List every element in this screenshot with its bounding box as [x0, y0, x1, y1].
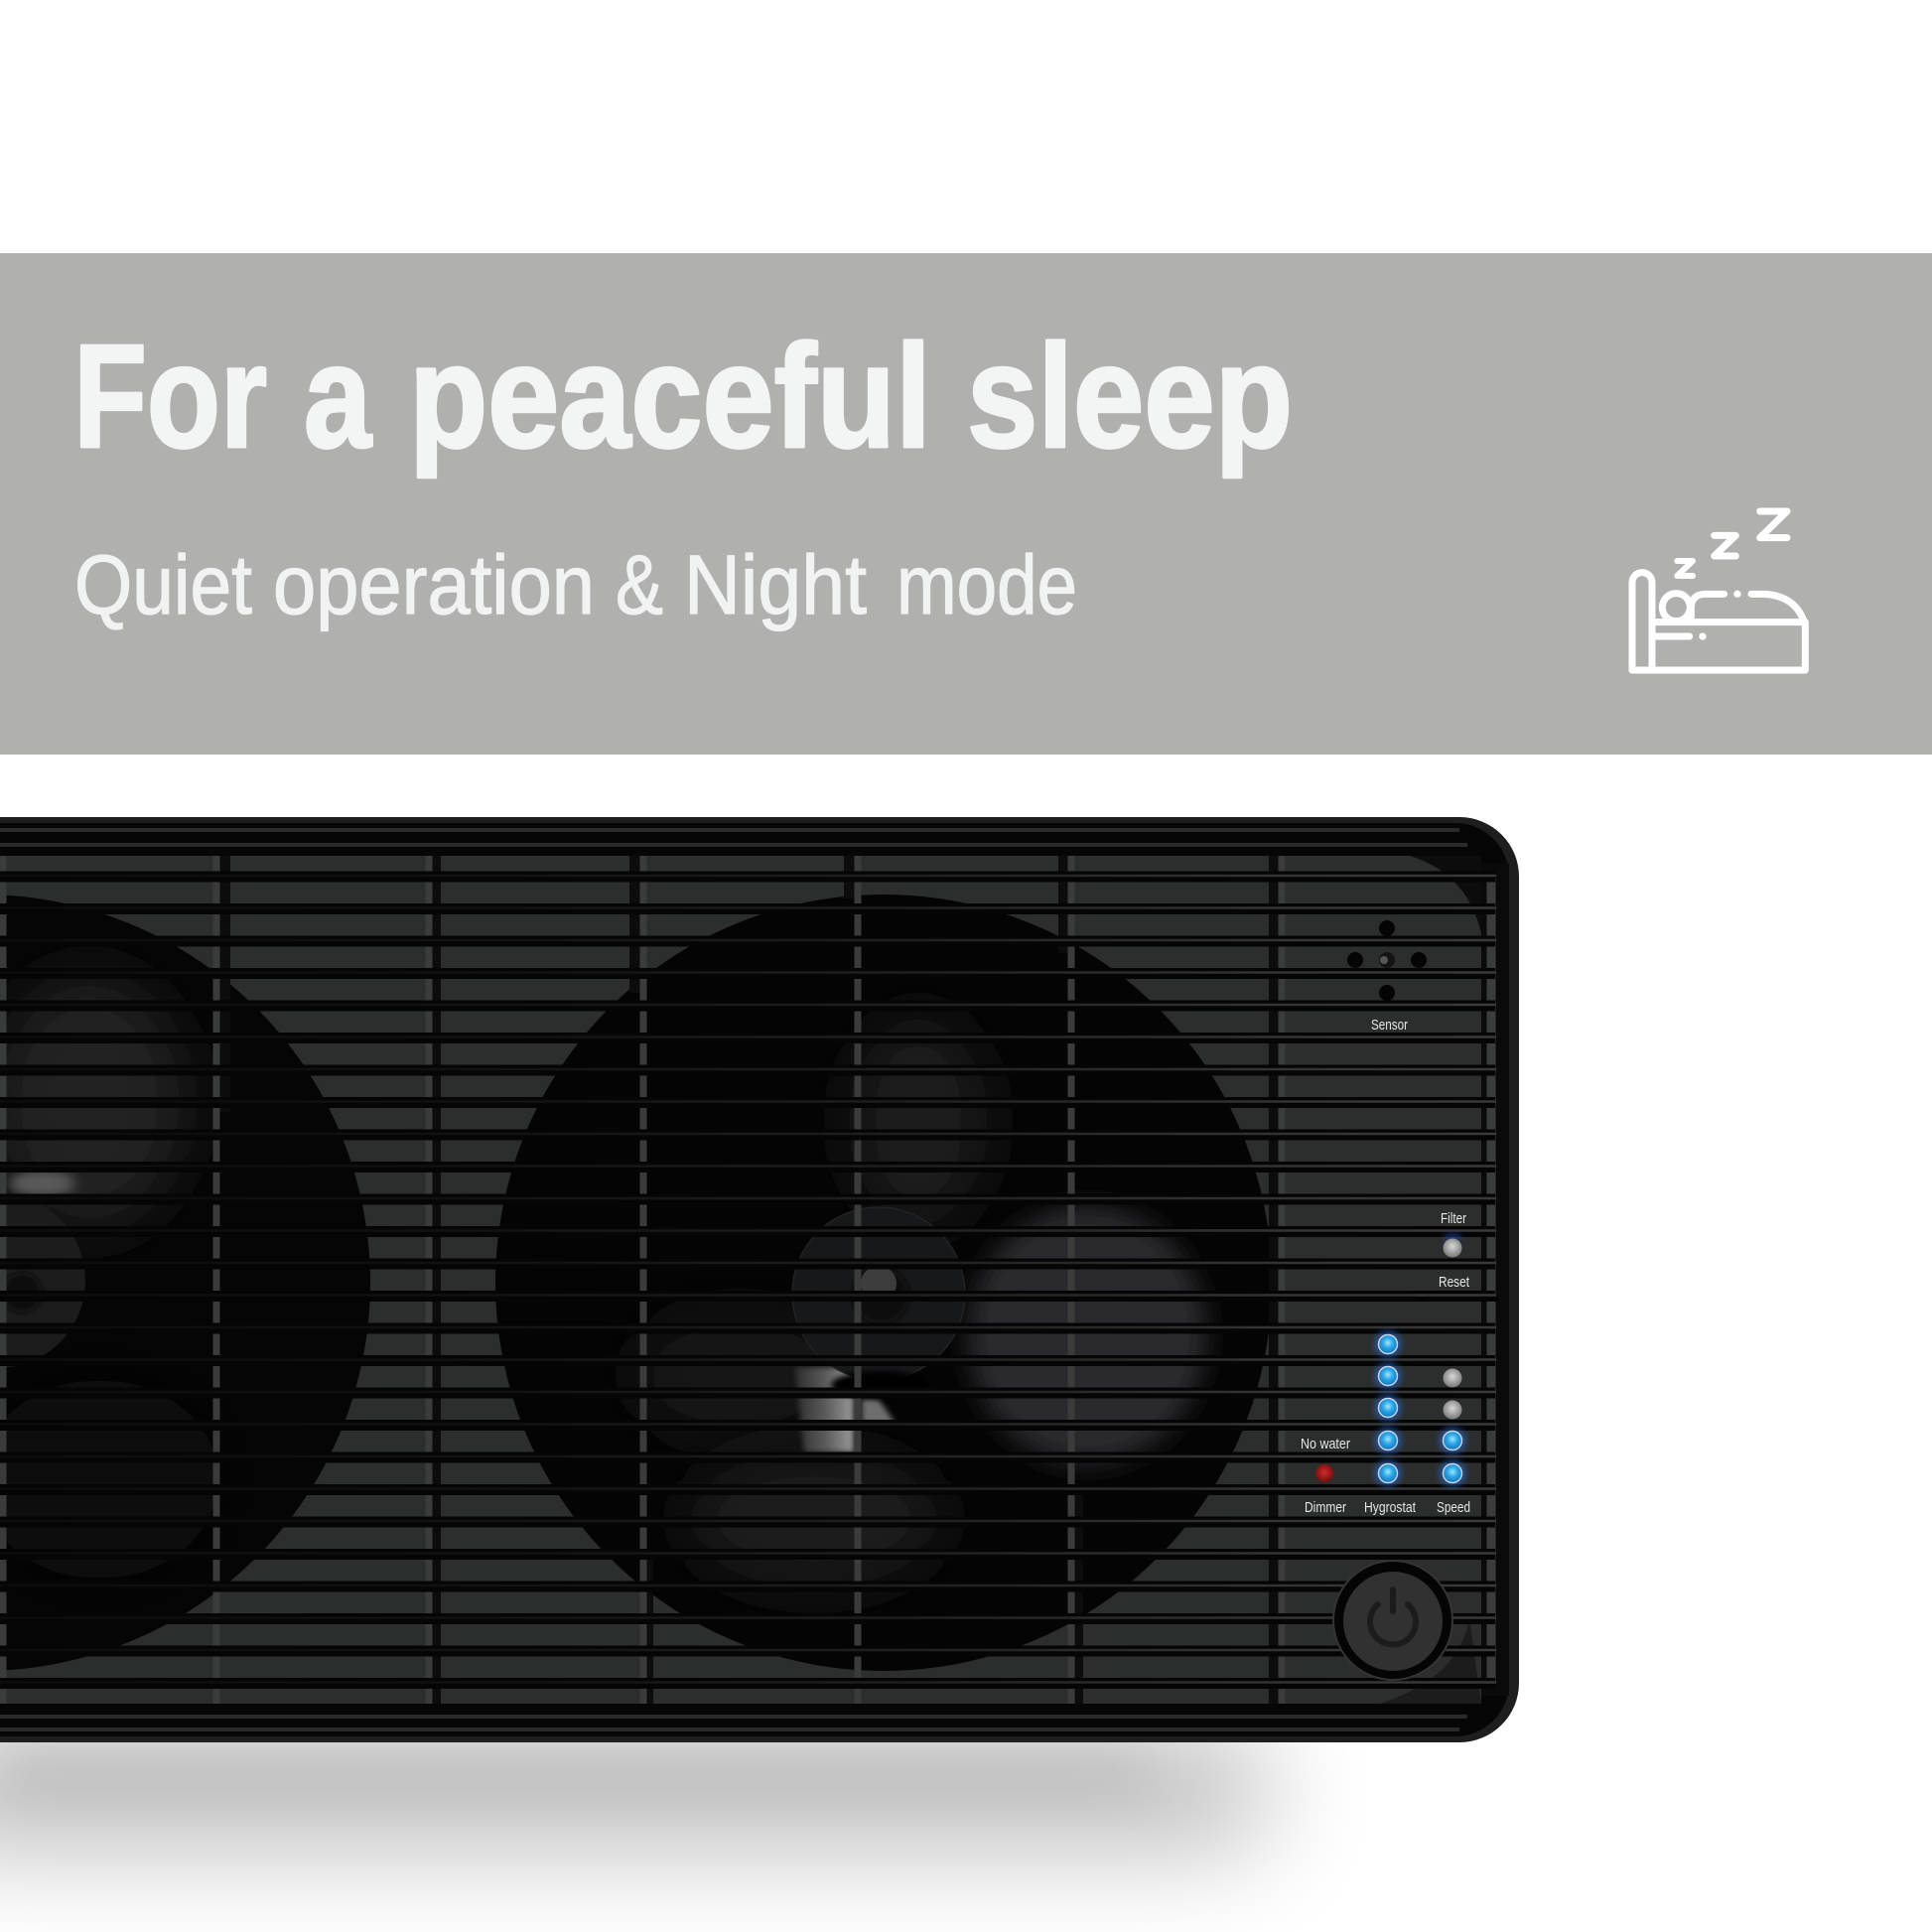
icon: sleeping person in bed	[1632, 511, 1805, 670]
title: peaceful	[409, 315, 931, 479]
bright fan blade highlight	[794, 1367, 854, 1452]
label: Hygrostat: Hygrostat	[1364, 1499, 1417, 1516]
title: sleep	[967, 315, 1293, 479]
fan: left	[0, 895, 370, 1671]
left fan hub	[6, 1205, 85, 1368]
subtitle: operation	[273, 538, 595, 631]
subtitle	[74, 538, 1077, 631]
subtitle: Night	[684, 538, 867, 631]
corner accents	[1410, 856, 1481, 933]
right side strip	[1481, 864, 1509, 1696]
title: a	[304, 315, 372, 479]
right fan hub	[792, 1207, 965, 1380]
vertical grille bars	[3, 856, 1282, 1704]
label: Dimmer: Dimmer	[1305, 1499, 1346, 1516]
LED: filter	[1444, 1234, 1461, 1257]
title	[73, 315, 1293, 479]
fan: right	[495, 895, 1272, 1671]
subtitle: Quiet	[74, 538, 252, 631]
label: Reset: Reset	[1439, 1274, 1470, 1291]
title: For	[73, 315, 267, 479]
label: Speed: Speed	[1437, 1499, 1470, 1516]
heading band	[0, 253, 1932, 755]
LED: red dimmer	[1315, 1464, 1333, 1482]
subtitle: mode	[897, 538, 1077, 631]
grille back panel	[0, 856, 1481, 1704]
sensor holes	[1347, 920, 1427, 1001]
LEDs: hygrostat column	[1374, 1330, 1402, 1487]
grille rails: highlight	[0, 876, 1495, 1682]
top and bottom frame ridges	[0, 830, 1467, 1729]
label: No water: No water	[1301, 1436, 1350, 1452]
power button	[1332, 1560, 1453, 1681]
device drop shadow	[0, 1732, 1261, 1847]
grille rails: shadow	[0, 877, 1495, 1684]
humidifier device body	[0, 817, 1519, 1742]
LEDs: speed column	[1439, 1368, 1466, 1487]
icon: power symbol	[1370, 1589, 1416, 1644]
subtitle: &	[616, 538, 663, 631]
label: Sensor: Sensor	[1371, 1017, 1408, 1034]
reset switch gap marks	[1422, 1298, 1494, 1302]
label: Filter: Filter	[1441, 1210, 1466, 1227]
